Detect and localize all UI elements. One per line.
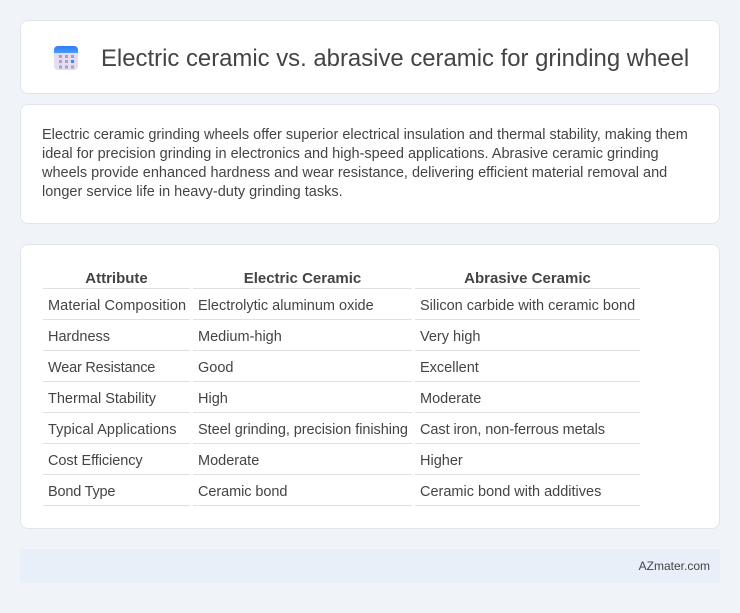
row: hardness: Hardness bbox=[48, 329, 110, 345]
row: cost efficiency bbox=[48, 453, 463, 469]
row: bond type bbox=[48, 484, 601, 500]
footer credit: AZmater.com bbox=[639, 559, 710, 573]
icon: calendar bbox=[54, 46, 78, 70]
table header bbox=[85, 270, 591, 287]
row: hardness bbox=[48, 329, 480, 345]
row: typical applications: Cast iron, non-ferrous metals bbox=[420, 422, 605, 438]
footer bar bbox=[20, 549, 720, 583]
row: wear resistance: Good bbox=[198, 360, 233, 376]
row: material composition bbox=[48, 298, 635, 314]
row: thermal stability: Thermal Stability bbox=[48, 391, 156, 407]
row: material composition: Material Composition bbox=[48, 298, 186, 314]
panel: header bbox=[20, 20, 720, 94]
summary paragraph: ideal for precision grinding in electronics and high-speed applications. Abrasive ceramic grinding bbox=[42, 146, 659, 162]
title: Electric ceramic vs. abrasive ceramic for grinding wheel bbox=[101, 45, 689, 72]
table header: Abrasive Ceramic bbox=[464, 270, 591, 287]
summary paragraph: wheels provide enhanced hardness and wear resistance, delivering efficient material removal and bbox=[42, 165, 667, 181]
row: wear resistance: Wear Resistance bbox=[48, 360, 155, 376]
row: cost efficiency: Cost Efficiency bbox=[48, 453, 143, 469]
row: hardness: Medium-high bbox=[198, 329, 282, 345]
row: wear resistance: Excellent bbox=[420, 360, 479, 376]
row: cost efficiency: Higher bbox=[420, 453, 463, 469]
row: bond type: Ceramic bond bbox=[198, 484, 287, 500]
table header: Electric Ceramic bbox=[244, 270, 361, 287]
row: cost efficiency: Moderate bbox=[198, 453, 259, 469]
panel: comparison table bbox=[20, 244, 720, 529]
panel: summary text bbox=[20, 104, 720, 224]
row: thermal stability: High bbox=[198, 391, 228, 407]
row: material composition: Electrolytic aluminum oxide bbox=[198, 298, 374, 314]
row: typical applications: Steel grinding, precision finishing bbox=[198, 422, 408, 438]
row: typical applications bbox=[48, 422, 605, 438]
row: thermal stability: Moderate bbox=[420, 391, 481, 407]
row: material composition: Silicon carbide with ceramic bond bbox=[420, 298, 635, 314]
row: bond type: Bond Type bbox=[48, 484, 115, 500]
table header: Attribute bbox=[85, 270, 148, 287]
row: typical applications: Typical Applications bbox=[48, 422, 177, 438]
row: thermal stability bbox=[48, 391, 481, 407]
summary paragraph: longer service life in heavy-duty grinding tasks. bbox=[42, 184, 343, 200]
summary paragraph: Electric ceramic grinding wheels offer superior electrical insulation and thermal stability, making them bbox=[42, 127, 688, 143]
row: wear resistance bbox=[48, 360, 479, 376]
row: bond type: Ceramic bond with additives bbox=[420, 484, 601, 500]
summary paragraph bbox=[42, 127, 688, 200]
row: hardness: Very high bbox=[420, 329, 480, 345]
